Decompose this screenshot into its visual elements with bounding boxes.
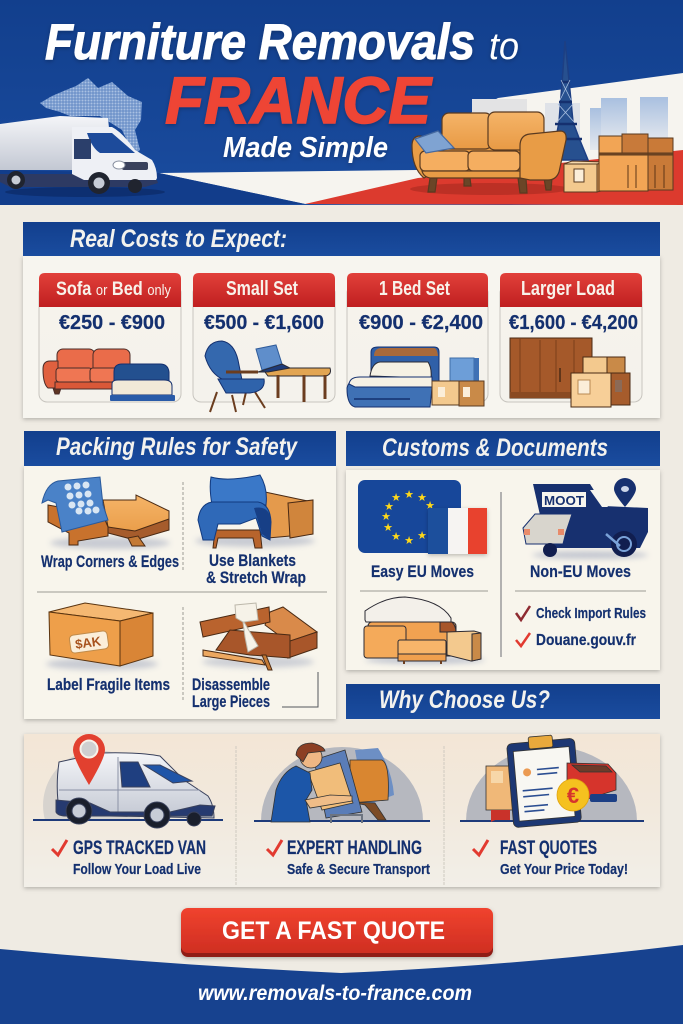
panel: packing rules (24, 431, 336, 719)
title word to: to (489, 26, 519, 68)
quotes feature (460, 733, 644, 878)
title line one: Furniture Removals (45, 14, 475, 70)
icon: navy truck with pin: MOOT (544, 493, 584, 508)
customs heading: Customs & Documents (382, 434, 608, 462)
icon: clipboard quote with euro coin: € (567, 783, 579, 808)
card: small set (193, 273, 335, 412)
card title: Small Set (226, 278, 298, 300)
EU stars: ★ (417, 492, 427, 504)
card header (193, 273, 335, 307)
moving boxes (564, 134, 673, 192)
why heading text: Why Choose Us? (379, 686, 550, 714)
icon: EU and French flags (358, 480, 487, 554)
text: use blankets and stretch wrap (206, 551, 306, 587)
packing heading: Packing Rules for Safety (56, 433, 298, 461)
check mark (516, 633, 530, 646)
EU stars: ★ (381, 511, 391, 523)
EU stars: ★ (404, 489, 414, 501)
line one: Disassemble (192, 675, 270, 694)
EU stars: ★ (384, 501, 394, 513)
feature subtitle: Get Your Price Today! (500, 861, 628, 878)
panel: real costs (23, 222, 660, 418)
card price: €900 - €2,400 (359, 312, 483, 334)
checklist (516, 605, 646, 649)
text: easy EU moves: Easy EU Moves (371, 562, 474, 581)
title FRANCE: FRANCE (165, 63, 433, 137)
check mark (52, 840, 67, 855)
French flag (428, 508, 487, 554)
panel: why choose us (24, 733, 660, 887)
check mark (516, 606, 530, 620)
real costs body (23, 256, 660, 418)
title (45, 14, 519, 164)
footer website: www.removals-to-france.com (198, 982, 472, 1005)
icon: mover carrying furniture (254, 743, 430, 823)
icon: clipboard quote with euro coin (460, 733, 644, 828)
button face (181, 908, 493, 953)
text: non-EU moves: Non-EU Moves (530, 562, 631, 581)
check mark (473, 840, 488, 855)
text: wrap corners and edges: Wrap Corners & Edges (41, 552, 179, 571)
why heading bar (346, 684, 660, 719)
red flag wedge (305, 150, 683, 205)
header banner (0, 0, 683, 205)
skyline (472, 97, 668, 153)
icon: labelled fragile box: $AK (74, 633, 103, 652)
map of France (40, 78, 142, 155)
customs heading bar (346, 431, 660, 466)
EU stars (381, 489, 435, 547)
real costs heading bar (23, 222, 660, 256)
button base (181, 912, 493, 957)
EU stars: ★ (383, 522, 393, 534)
EU stars: ★ (404, 535, 414, 547)
EU stars: ★ (391, 531, 401, 543)
button label: GET A FAST QUOTE (222, 917, 445, 945)
delivery truck (0, 116, 165, 197)
packing body (24, 466, 336, 719)
card: 1 bed set (347, 273, 488, 407)
icon: wardrobe and boxes (510, 338, 630, 407)
check import rules: Check Import Rules (536, 605, 646, 622)
feature subtitle: Follow Your Load Live (73, 861, 201, 878)
why body (24, 734, 660, 887)
card body (347, 285, 488, 402)
line one: Use Blankets (209, 551, 296, 570)
card title: 1 Bed Set (379, 278, 450, 300)
line two: Large Pieces (192, 692, 270, 711)
handling feature (254, 743, 430, 878)
panel: customs and documents (346, 431, 660, 670)
icon: blanket wrapped chair and box (195, 475, 315, 548)
van feature (33, 734, 223, 878)
button: get a fast quote (181, 908, 493, 957)
feature title: EXPERT HANDLING (287, 838, 422, 859)
header blue field (0, 0, 683, 205)
blue lower corner (0, 170, 305, 205)
card body (39, 285, 181, 402)
footer blue wave (0, 945, 683, 1024)
EU stars: ★ (391, 492, 401, 504)
text: disassemble large pieces (192, 675, 270, 711)
icon: wrapped chair and table (42, 477, 170, 549)
EU stars: ★ (425, 500, 435, 512)
card body (500, 285, 642, 402)
heading: why choose us (346, 684, 660, 719)
EU stars: ★ (417, 530, 427, 542)
title made simple: Made Simple (223, 132, 388, 164)
icon: bed and boxes (347, 347, 484, 407)
card: larger load (500, 273, 642, 407)
couch illustration (410, 112, 570, 195)
text: label fragile items: Label Fragile Items (47, 675, 170, 694)
check mark (267, 840, 282, 855)
icon: chair laptop and table (205, 341, 330, 412)
icon: labelled fragile box (46, 603, 158, 670)
icon: disassembled furniture (200, 603, 317, 670)
card price: €500 - €1,600 (204, 312, 324, 334)
icon: orange sofa and blue seat (43, 349, 175, 401)
card header (500, 273, 642, 307)
card title: Larger Load (521, 278, 615, 300)
card body (193, 285, 335, 402)
card: sofa or bed only (39, 273, 181, 402)
icon: white van with GPS pin (33, 734, 223, 828)
card header (347, 273, 488, 307)
icon: navy truck with pin (523, 478, 648, 559)
card title: Sofa or Bed only (56, 279, 171, 300)
real costs heading: Real Costs to Expect: (70, 225, 287, 253)
icon: wrapped sofa and box (364, 597, 485, 664)
card header (39, 273, 181, 307)
packing heading bar (24, 431, 336, 466)
Eiffel Tower (552, 41, 588, 160)
location pin (614, 478, 636, 507)
white flag wedge (159, 73, 683, 205)
customs body (346, 470, 660, 670)
GPS pin (73, 734, 105, 785)
line two: & Stretch Wrap (206, 568, 306, 587)
card price: €1,600 - €4,200 (509, 312, 638, 334)
feature title: FAST QUOTES (500, 838, 597, 859)
feature title: GPS TRACKED VAN (73, 838, 206, 859)
douane link: Douane.gouv.fr (536, 632, 636, 649)
feature subtitle: Safe & Secure Transport (287, 861, 430, 878)
card price: €250 - €900 (59, 312, 165, 334)
